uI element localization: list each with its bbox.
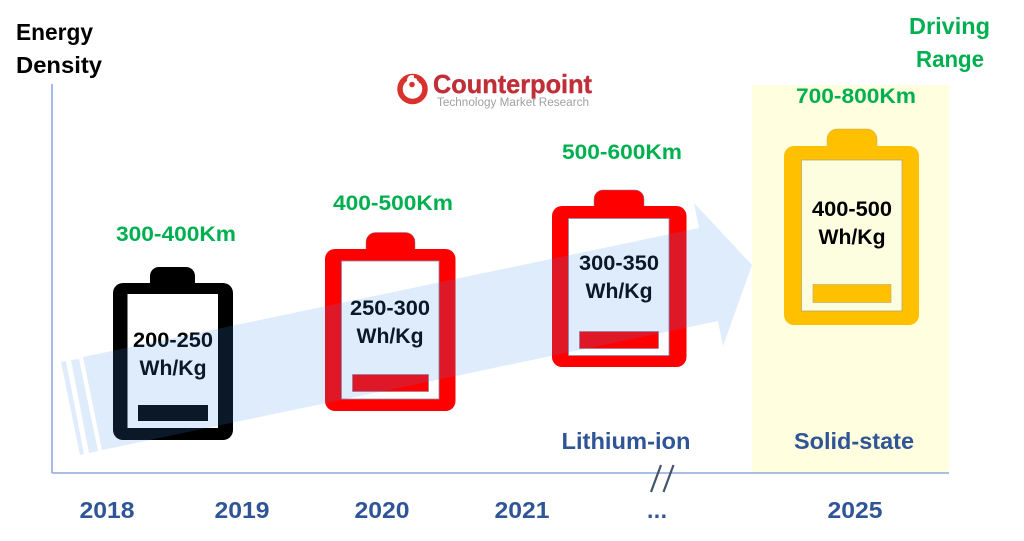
density labels: 200-250 — [133, 329, 213, 352]
technology labels: Lithium-ion — [562, 428, 690, 454]
density labels — [133, 198, 892, 380]
driving range labels: 700-800Km — [796, 85, 916, 108]
icon: logo ring — [400, 75, 425, 102]
technology labels — [562, 428, 914, 454]
heading: driving range — [909, 13, 990, 72]
density labels: Wh/Kg — [586, 280, 652, 303]
year labels — [80, 497, 883, 523]
driving range labels: 500-600Km — [562, 141, 682, 164]
year labels: ... — [647, 497, 667, 523]
density labels: Wh/Kg — [818, 226, 886, 249]
axes — [52, 84, 949, 473]
density labels: Wh/Kg — [356, 325, 424, 348]
year labels: 2018 — [80, 497, 135, 523]
battery: lithium-ion red — [552, 190, 686, 367]
y-axis heading: energy density: Energy — [16, 19, 93, 45]
battery: 2018 black — [113, 267, 233, 440]
battery: 2025 solid-state amber — [784, 129, 919, 325]
logo wordmark: Counterpoint — [433, 69, 592, 99]
heading: driving range: Range — [916, 46, 984, 72]
year labels: 2021 — [494, 497, 550, 523]
density labels: Wh/Kg — [140, 357, 206, 380]
density labels: 250-300 — [350, 297, 430, 320]
year labels: 2019 — [214, 497, 270, 523]
year labels: 2020 — [354, 497, 410, 523]
density labels: 300-350 — [579, 252, 659, 275]
driving range labels: 400-500Km — [333, 192, 453, 215]
y-axis heading: energy density: Density — [16, 52, 102, 78]
battery: 2020 red — [325, 232, 456, 411]
panel: solid-state highlight — [752, 85, 949, 473]
heading: driving range: Driving — [909, 13, 990, 39]
year labels: 2025 — [828, 497, 883, 523]
axis break mark — [651, 465, 674, 492]
logo: Counterpoint — [400, 69, 592, 109]
driving range labels — [116, 85, 916, 246]
technology labels: Solid-state — [794, 428, 914, 454]
driving range labels: 300-400Km — [116, 223, 236, 246]
y-axis heading: energy density — [16, 19, 102, 78]
arrow: growth trend — [61, 203, 752, 455]
density labels: 400-500 — [812, 198, 892, 221]
logo tagline: Technology Market Research — [437, 97, 589, 109]
